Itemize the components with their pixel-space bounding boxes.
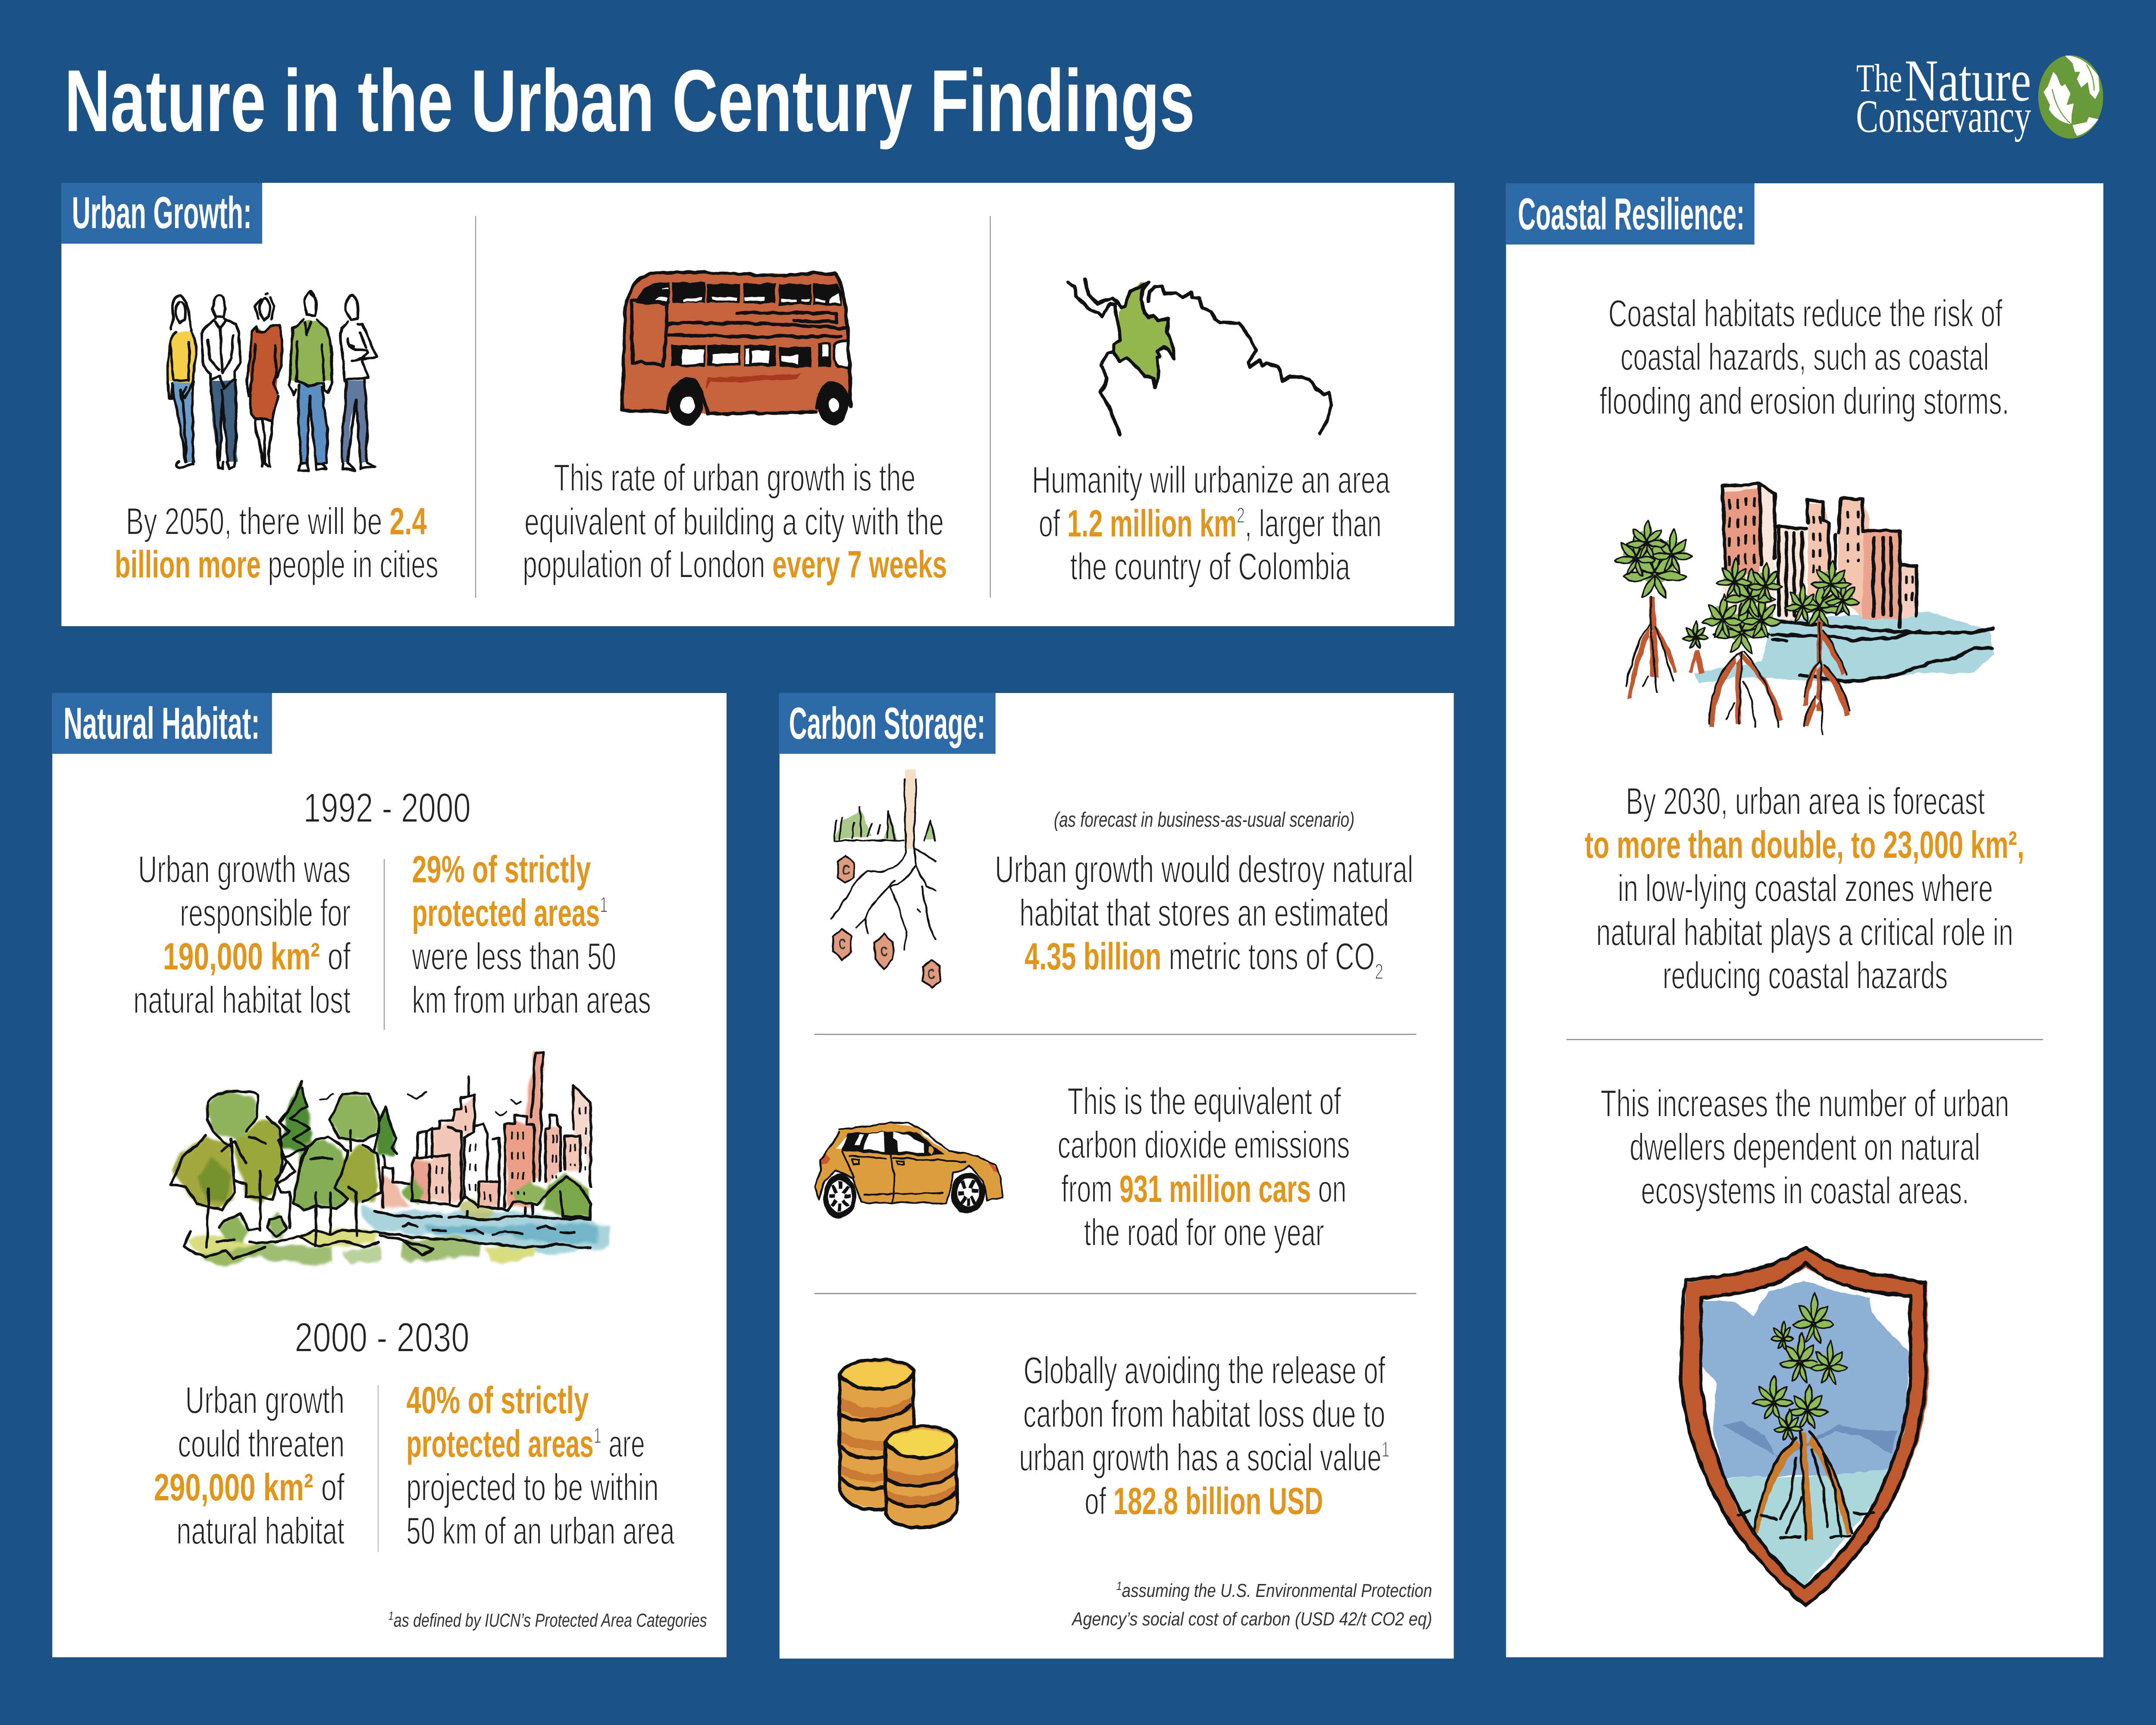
text: 290,000 km2 threatened bbox=[154, 1379, 345, 1552]
text: coastal habitats reduce risk: flooding and erosion during storms. bbox=[1600, 380, 2009, 422]
heading: coastal resilience: Coastal Resilience: bbox=[1518, 188, 1745, 239]
text: to more than double: in low-lying coastal zones where bbox=[1618, 867, 1993, 910]
text: london every 7 weeks: equivalent of building a city with the bbox=[524, 500, 944, 543]
text: urban dwellers dependent bbox=[1601, 1082, 2009, 1212]
icon: car bbox=[815, 1123, 1003, 1219]
text: 931 million cars: from 931 million cars on bbox=[1061, 1167, 1347, 1210]
panel: urban growth bbox=[61, 183, 1454, 626]
text: 1.2 million km2: 2 bbox=[1237, 503, 1245, 527]
text: 29% of protected areas: km from urban areas bbox=[412, 979, 651, 1021]
text: london every 7 weeks: population of London every 7 weeks bbox=[523, 543, 947, 586]
text: 931 million cars bbox=[1058, 1080, 1350, 1254]
text: 190,000 km2 lost: responsible for bbox=[180, 891, 351, 934]
text: 2.4 billion more people: billion more people in cities bbox=[115, 543, 439, 586]
text: 931 million cars: This is the equivalent of bbox=[1067, 1080, 1341, 1123]
text: coastal habitats reduce risk bbox=[1600, 292, 2009, 422]
text: 182.8 billion USD bbox=[1019, 1349, 1390, 1522]
period: 1992 - 2000: 1992 - 2000 bbox=[304, 785, 471, 831]
text: 29% of protected areas: 29% of strictly bbox=[412, 848, 591, 891]
text: 290,000 km2 threatened: Urban growth bbox=[185, 1379, 345, 1421]
heading: natural habitat bbox=[52, 693, 272, 754]
text: coastal habitats reduce risk: Coastal habitats reduce the risk of bbox=[1608, 292, 2003, 335]
icon: five people bbox=[166, 292, 376, 470]
heading: natural habitat: Natural Habitat: bbox=[63, 698, 260, 748]
text: to more than double: reducing coastal hazards bbox=[1663, 954, 1948, 997]
illustration: mangroves and city bbox=[1615, 484, 1994, 735]
heading: urban growth bbox=[61, 183, 262, 244]
footnote: social cost of carbon bbox=[1071, 1579, 1432, 1630]
period: 2000 - 2030: 2000 - 2030 bbox=[295, 1314, 470, 1361]
text: to more than double: to more than double, to 23,000 km², bbox=[1585, 823, 2024, 866]
text: 931 million cars: carbon dioxide emissions bbox=[1058, 1123, 1350, 1166]
text: 2.4 billion more people: By 2050, there will be 2.4 bbox=[126, 500, 427, 543]
icon: tree roots and carbon: C bbox=[928, 966, 935, 982]
text: 1.2 million km2 bbox=[1032, 458, 1390, 588]
icon: tree roots and carbon: C bbox=[842, 861, 849, 878]
text: 1.2 million km2: Humanity will urbanize an area bbox=[1032, 458, 1390, 501]
text: 40% of protected areas: are bbox=[602, 1422, 645, 1465]
heading: carbon storage bbox=[779, 693, 996, 754]
icon: map of colombia bbox=[1069, 278, 1332, 435]
heading: coastal resilience bbox=[1506, 183, 1755, 245]
logo wordmark bbox=[1856, 47, 2031, 142]
text: 1.2 million km2: of 1.2 million km bbox=[1039, 502, 1263, 545]
text: 182.8 billion USD: 1 bbox=[1382, 1437, 1390, 1462]
text: 4.35 billion metric tons: Urban growth would destroy natural bbox=[995, 848, 1413, 891]
text: 2.4 billion more people bbox=[115, 500, 439, 586]
text: 190,000 km2 lost bbox=[133, 848, 351, 1021]
icon: tree roots and carbon: C bbox=[880, 943, 888, 960]
text: urban dwellers dependent: This increases the number of urban bbox=[1601, 1082, 2009, 1125]
text: 29% of protected areas: were less than 50 bbox=[412, 935, 616, 978]
logo wordmark: Nature bbox=[1905, 47, 2031, 113]
text: 190,000 km2 lost: Urban growth was bbox=[138, 848, 351, 891]
text: coastal habitats reduce risk: coastal hazards, such as coastal bbox=[1620, 336, 1989, 378]
text: to more than double bbox=[1585, 780, 2024, 997]
text: 40% of protected areas: 50 km of an urban area bbox=[406, 1509, 674, 1552]
text: 40% of protected areas: projected to be within bbox=[406, 1466, 659, 1509]
logo wordmark: The bbox=[1856, 56, 1902, 100]
text: 190,000 km2 lost: natural habitat lost bbox=[133, 979, 351, 1021]
heading: urban growth: Urban Growth: bbox=[72, 187, 252, 238]
text: urban dwellers dependent: ecosystems in coastal areas. bbox=[1641, 1169, 1969, 1212]
icon: coin stacks bbox=[840, 1359, 957, 1527]
text: 182.8 billion USD: of 182.8 billion USD bbox=[1084, 1480, 1323, 1522]
text: 40% of protected areas bbox=[406, 1379, 674, 1552]
logo: The Nature Conservancy bbox=[1856, 47, 2103, 142]
icon: shield with mangrove bbox=[1681, 1247, 1929, 1608]
text: 4.35 billion metric tons: (as forecast in business-as-usual scenario) bbox=[1054, 809, 1354, 831]
footnote: iucn: as defined by IUCN’s Protected Area Categories bbox=[394, 1610, 707, 1631]
panel: coastal resilience bbox=[1506, 183, 2103, 1657]
footnote: social cost of carbon: Agency’s social cost of carbon (USD 42/t CO2 eq) bbox=[1071, 1609, 1432, 1630]
text: 29% of protected areas bbox=[412, 848, 651, 1021]
text: 290,000 km2 threatened: natural habitat bbox=[176, 1509, 345, 1552]
text: 182.8 billion USD: Globally avoiding the release of bbox=[1024, 1349, 1385, 1392]
footnote: iucn: 1 bbox=[389, 1609, 394, 1623]
text: urban dwellers dependent: dwellers dependent on natural bbox=[1630, 1126, 1980, 1168]
text: 29% of protected areas: 1 bbox=[600, 892, 608, 917]
text: 4.35 billion metric tons: 4.35 billion metric tons of CO bbox=[1025, 935, 1401, 978]
text: 40% of protected areas: 1 bbox=[594, 1423, 602, 1448]
text: 1.2 million km2: , larger than bbox=[1245, 502, 1382, 545]
text: 29% of protected areas: protected areas bbox=[412, 891, 600, 934]
text: 931 million cars: the road for one year bbox=[1084, 1211, 1324, 1254]
text: 182.8 billion USD: carbon from habitat loss due to bbox=[1023, 1393, 1385, 1435]
heading: carbon storage: Carbon Storage: bbox=[789, 698, 985, 748]
text: london every 7 weeks bbox=[523, 456, 947, 586]
text: to more than double: natural habitat plays a critical role in bbox=[1596, 911, 2013, 953]
icon: london bus bbox=[622, 272, 852, 425]
title: Nature in the Urban Century Findings bbox=[64, 51, 1195, 150]
footnote: social cost of carbon: assuming the U.S. Environmental Protection bbox=[1122, 1580, 1432, 1601]
text: 182.8 billion USD: urban growth has a social value bbox=[1019, 1436, 1437, 1479]
text: to more than double: By 2030, urban area is forecast bbox=[1626, 780, 1985, 822]
footnote: social cost of carbon: 1 bbox=[1116, 1579, 1122, 1593]
panel: natural habitat bbox=[52, 693, 727, 1657]
icon: tree roots and carbon bbox=[830, 770, 940, 988]
logo wordmark: Conservancy bbox=[1856, 91, 2031, 142]
text: 4.35 billion metric tons bbox=[995, 809, 1413, 984]
text: 4.35 billion metric tons: habitat that stores an estimated bbox=[1019, 891, 1389, 934]
text: 190,000 km2 lost: 190,000 km² of bbox=[163, 935, 351, 978]
text: 4.35 billion metric tons: 2 bbox=[1375, 959, 1383, 984]
illustration: forest and city by water bbox=[171, 1053, 611, 1265]
icon: tree roots and carbon: C bbox=[838, 936, 846, 953]
text: 290,000 km2 threatened: could threaten bbox=[178, 1422, 345, 1465]
logo globe leaf bbox=[2038, 55, 2103, 138]
text: london every 7 weeks: This rate of urban growth is the bbox=[554, 456, 915, 499]
text: 40% of protected areas: 40% of strictly bbox=[406, 1379, 589, 1421]
text: 290,000 km2 threatened: 290,000 km² of bbox=[154, 1466, 345, 1509]
text: 1.2 million km2: the country of Colombia bbox=[1070, 545, 1350, 588]
panel: carbon storage bbox=[779, 693, 1454, 1659]
text: 40% of protected areas: protected areas bbox=[406, 1422, 594, 1465]
